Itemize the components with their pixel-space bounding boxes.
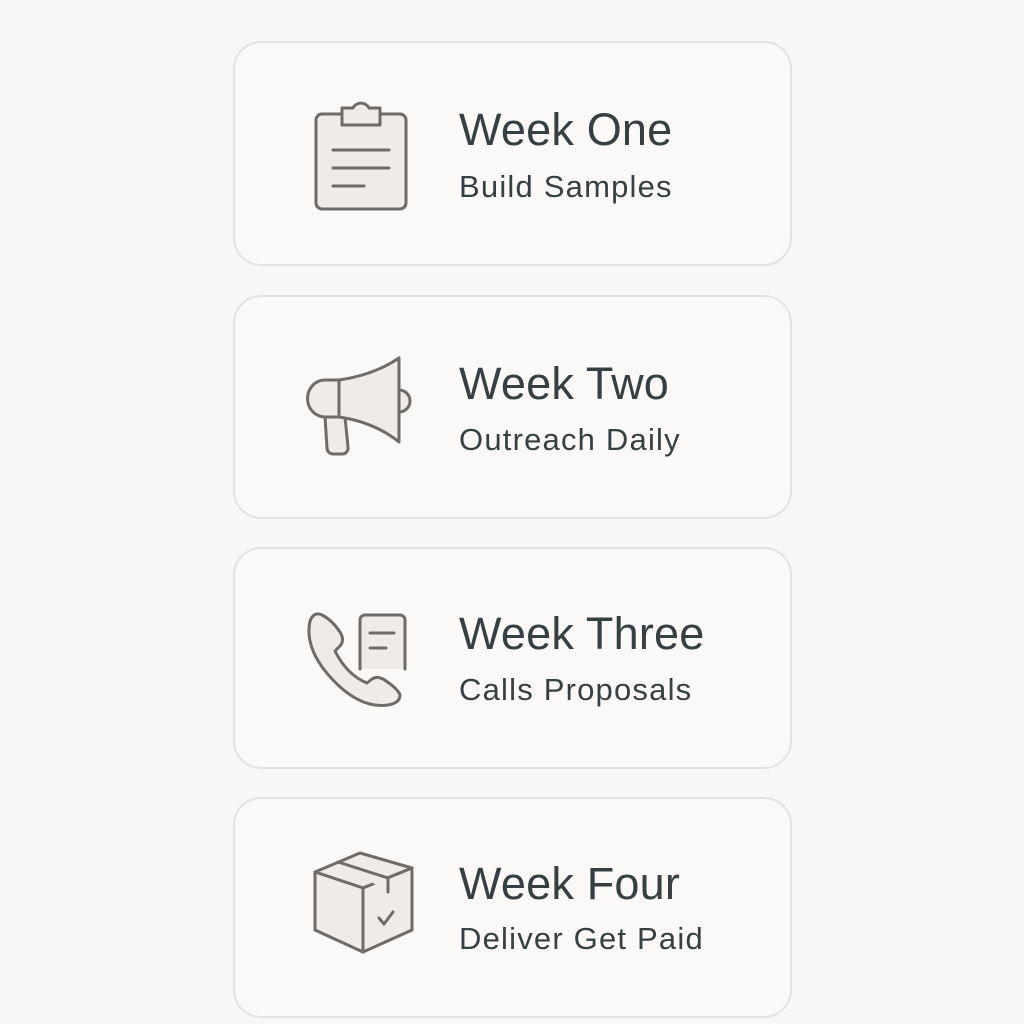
subtitle: Deliver Get Paid	[459, 921, 704, 956]
card: week three	[233, 547, 792, 769]
card: week one	[233, 41, 792, 266]
subtitle: Build Samples	[459, 169, 673, 204]
title: week three: Week Three	[459, 608, 704, 659]
card: week two	[233, 295, 792, 519]
subtitle: Calls Proposals	[459, 672, 692, 707]
title: week four: Week Four	[459, 858, 680, 909]
title: week two: Week Two	[459, 358, 669, 409]
icon: megaphone	[306, 356, 412, 456]
icon: phone with document	[307, 612, 406, 707]
icon: clipboard	[314, 102, 408, 210]
card: week four	[233, 797, 792, 1018]
subtitle: Outreach Daily	[459, 422, 681, 457]
title: week one: Week One	[459, 104, 672, 155]
icon: box with check	[314, 852, 414, 954]
